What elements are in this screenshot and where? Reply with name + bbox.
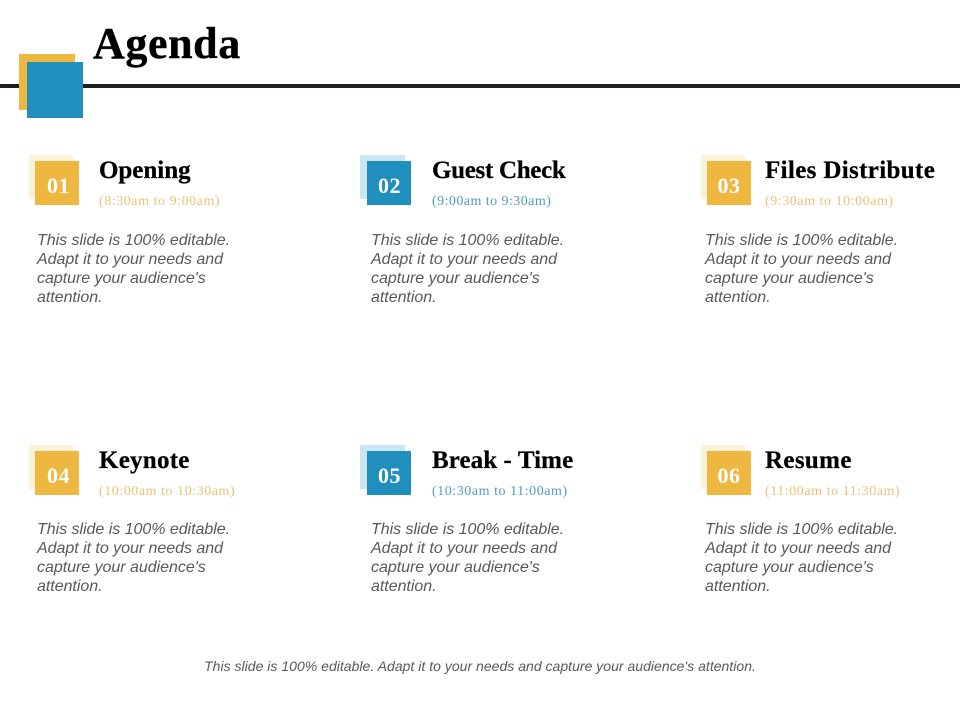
description: Guest Check: Adapt it to your needs and	[371, 251, 557, 268]
time: Opening: (8:30am to 9:00am)	[99, 194, 220, 209]
description: Break - Time: attention.	[371, 578, 437, 595]
description: Keynote: Adapt it to your needs and	[37, 540, 223, 557]
number badge 05: 05	[378, 463, 401, 488]
description: Opening: Adapt it to your needs and	[37, 251, 223, 268]
description: Opening: This slide is 100% editable.	[37, 232, 230, 249]
description: Resume: Adapt it to your needs and	[705, 540, 891, 557]
description: Break - Time: Adapt it to your needs and	[371, 540, 557, 557]
agenda item 01: Opening	[29, 155, 230, 306]
description: Keynote	[36, 521, 230, 595]
description: Files Distribute: This slide is 100% editable.	[705, 232, 898, 249]
description: Guest Check: attention.	[371, 289, 437, 306]
number badge 06	[701, 445, 751, 495]
heading: Opening: Opening	[99, 157, 191, 184]
number badge 04	[29, 445, 79, 495]
description: Opening	[36, 232, 230, 306]
number badge 02	[360, 155, 411, 205]
description: Resume: attention.	[705, 578, 771, 595]
title: Agenda	[93, 19, 241, 68]
number badge 05	[360, 445, 411, 495]
time: Keynote: (10:00am to 10:30am)	[99, 484, 235, 499]
description: Keynote: capture your audience's	[37, 559, 206, 576]
description: Files Distribute	[704, 232, 898, 306]
description: Opening: capture your audience's	[37, 270, 206, 287]
description: Resume: capture your audience's	[705, 559, 874, 576]
number badge 04: 04	[47, 463, 70, 488]
header rule	[0, 84, 960, 88]
heading: Resume: Resume	[765, 447, 852, 474]
agenda item 06: Resume	[701, 445, 900, 595]
description: Break - Time: This slide is 100% editable.	[371, 521, 564, 538]
description: Opening: attention.	[37, 289, 103, 306]
time: Guest Check: (9:00am to 9:30am)	[432, 194, 551, 209]
agenda item 02: Guest Check	[360, 155, 566, 306]
description: Files Distribute: attention.	[705, 289, 771, 306]
number badge 03	[701, 155, 751, 205]
time: Resume: (11:00am to 11:30am)	[765, 484, 900, 499]
icon: overlapping title squares	[19, 54, 83, 118]
time: Break - Time: (10:30am to 11:00am)	[432, 484, 568, 499]
description: Resume	[704, 521, 898, 595]
number badge 03: 03	[718, 173, 740, 198]
number badge 01: 01	[47, 173, 70, 198]
description: Files Distribute: capture your audience's	[705, 270, 874, 287]
heading: Guest Check: Guest Check	[432, 157, 566, 184]
description: Guest Check: capture your audience's	[371, 270, 540, 287]
heading: Keynote: Keynote	[99, 447, 190, 474]
time: Files Distribute: (9:30am to 10:00am)	[765, 194, 894, 209]
agenda item 03: Files Distribute	[701, 155, 935, 306]
description: Resume: This slide is 100% editable.	[705, 521, 898, 538]
number badge 06: 06	[718, 463, 740, 488]
heading: Break - Time: Break - Time	[432, 447, 573, 474]
number badge 02: 02	[378, 173, 401, 198]
description: Keynote: This slide is 100% editable.	[37, 521, 230, 538]
description: Guest Check	[370, 232, 564, 306]
description: Break - Time	[370, 521, 564, 595]
heading: Files Distribute: Files Distribute	[765, 157, 935, 184]
description: Break - Time: capture your audience's	[371, 559, 540, 576]
description: Keynote: attention.	[37, 578, 103, 595]
description: Guest Check: This slide is 100% editable.	[371, 232, 564, 249]
description: Files Distribute: Adapt it to your needs and	[705, 251, 891, 268]
agenda item 04: Keynote	[29, 445, 235, 595]
footer note: This slide is 100% editable. Adapt it to your needs and capture your audience's attention.	[204, 658, 756, 674]
agenda item 05: Break - Time	[360, 445, 573, 595]
number badge 01	[29, 155, 79, 205]
